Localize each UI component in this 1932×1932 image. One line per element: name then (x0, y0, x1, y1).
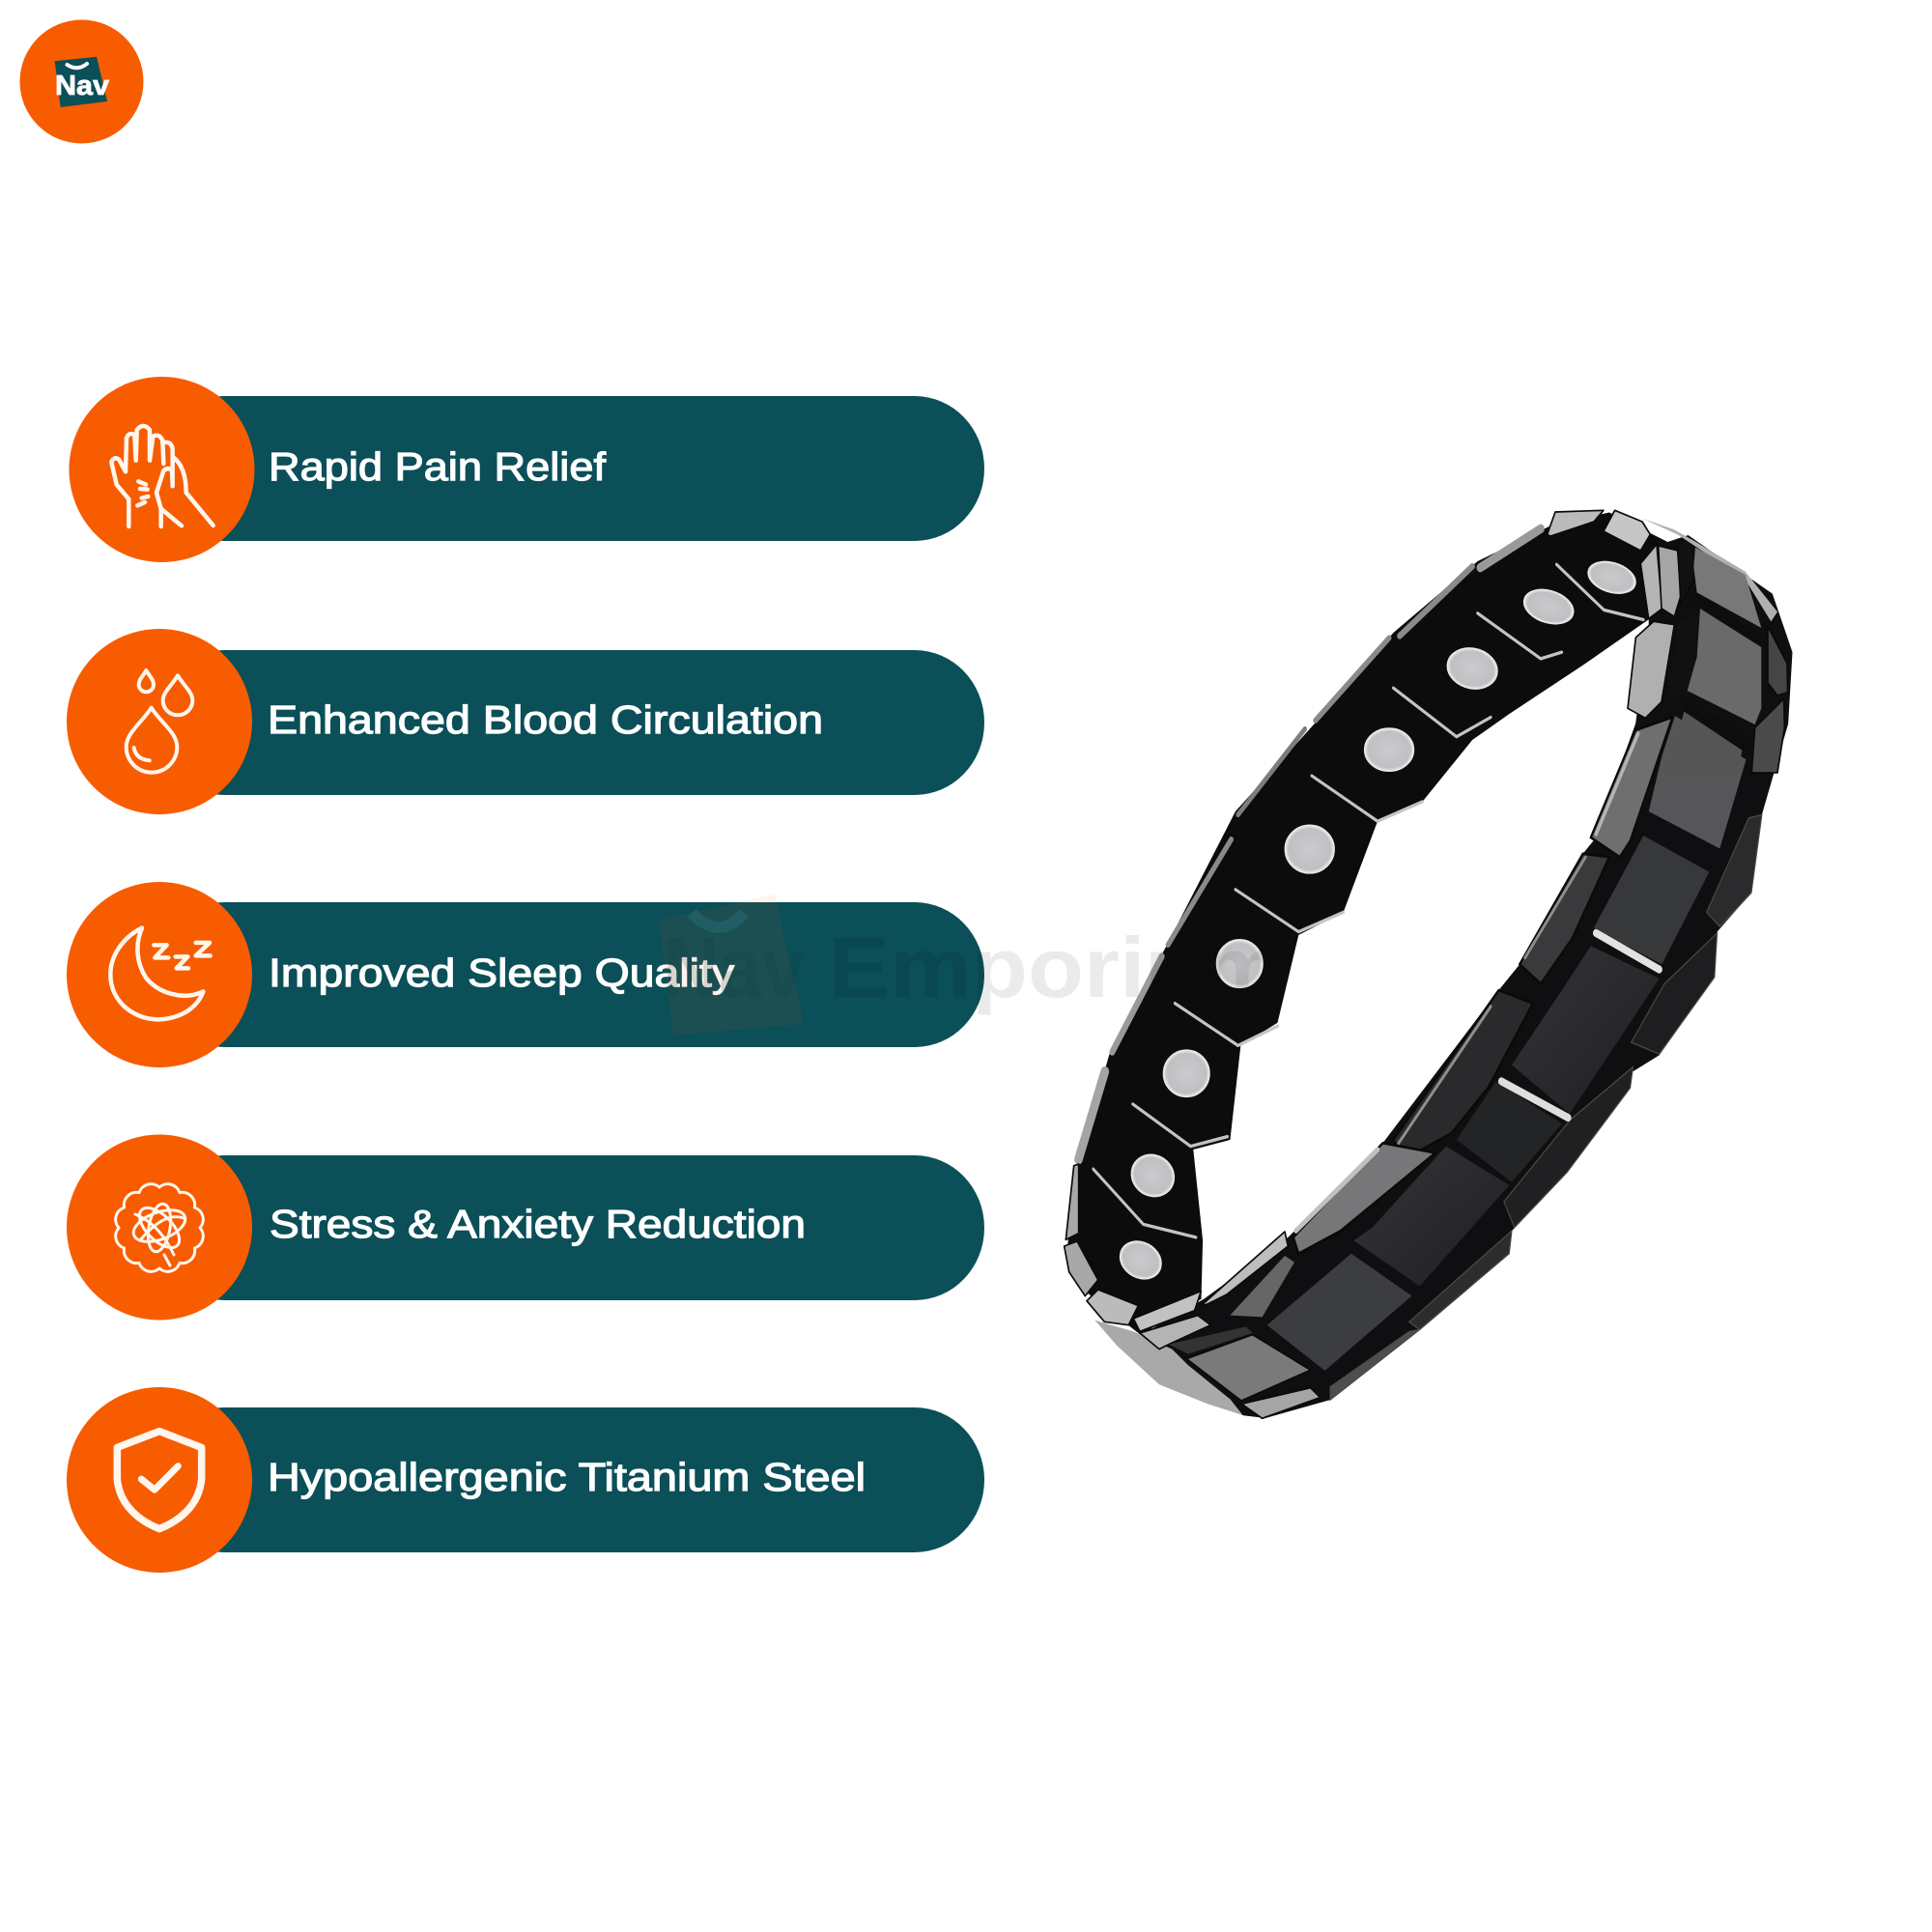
back band: black inner links (1066, 512, 1667, 1335)
benefit row: Improved Sleep Quality (67, 882, 984, 1067)
front band: left side links (1293, 717, 1672, 1254)
watermark: Nav Emporium: Emporium (829, 920, 1283, 1015)
front band: right side links (1330, 814, 1762, 1400)
front band: base (1127, 535, 1793, 1418)
silver highlights (1296, 733, 1660, 1231)
front band: centre plates (1267, 716, 1747, 1371)
icon: shield with check (117, 1432, 202, 1529)
product image: magnetic bracelet (1065, 510, 1793, 1418)
logo badge: Nav (55, 71, 109, 101)
bracelet body (1066, 512, 1793, 1418)
watermark: Nav Emporium: Nav (663, 920, 805, 1015)
logo badge (19, 19, 143, 143)
icon: moon and zzz (110, 928, 211, 1019)
label: Hypoallergenic Titanium Steel (268, 1455, 866, 1499)
benefit row: Stress & Anxiety Reduction (67, 1134, 984, 1320)
label: Stress & Anxiety Reduction (270, 1202, 806, 1246)
outer rim: silver segments (1078, 528, 1541, 1159)
bracelet detail: top right links (1548, 510, 1788, 773)
label: Enhanced Blood Circulation (268, 697, 823, 742)
magnets (1117, 556, 1638, 1285)
label: Rapid Pain Relief (269, 444, 607, 489)
icon: water drops (127, 670, 192, 773)
link edge highlights (1094, 564, 1643, 1237)
bracelet detail: bottom left links (1065, 1164, 1321, 1418)
icon: tangled brain (116, 1184, 203, 1271)
label: Improved Sleep Quality (269, 951, 735, 995)
benefit row: Rapid Pain Relief (70, 377, 984, 562)
watermark: Nav Emporium (659, 895, 1283, 1036)
icon: hand with wrist pain (111, 426, 213, 526)
benefit row: Hypoallergenic Titanium Steel (67, 1387, 984, 1573)
benefit row: Enhanced Blood Circulation (67, 629, 984, 814)
